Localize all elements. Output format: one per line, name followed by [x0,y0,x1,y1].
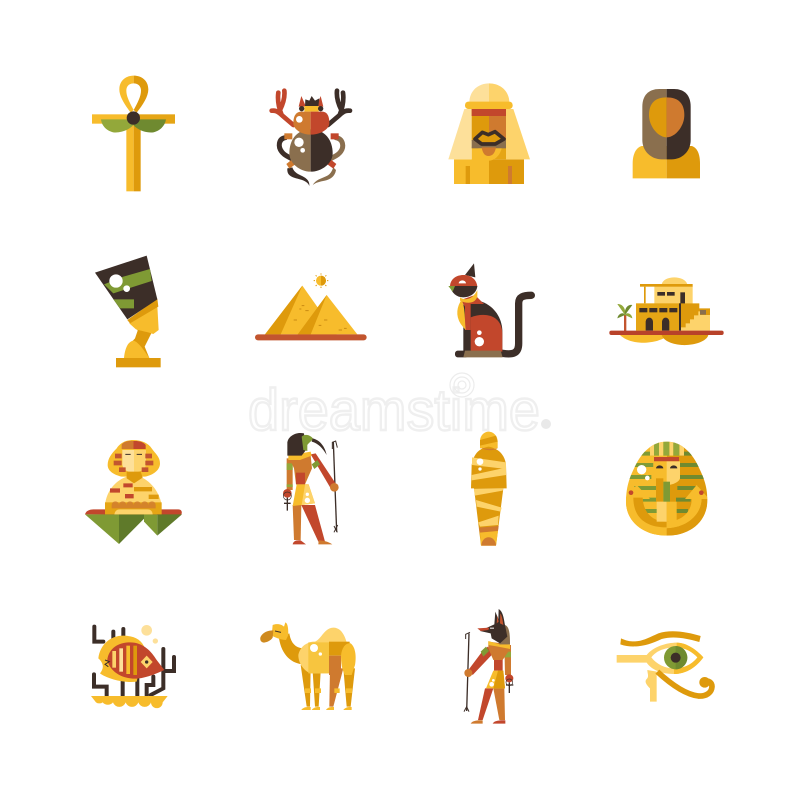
icon: Bastet cat [448,263,531,357]
icon: eye of Horus [617,631,712,702]
icon: Tutankhamun mask [626,442,708,536]
icon: pyramids with sun [255,273,367,340]
icon: mummy [471,432,507,546]
icon: sphinx [85,440,182,544]
icon: sun [314,273,328,288]
icon: palm leaves [617,304,632,318]
icon: woman in hijab [633,89,700,178]
watermark: dreamstime [248,378,540,443]
icon: bedouin man [448,83,530,184]
icon: ankh [92,76,175,191]
icon: desert house with palm [609,277,724,345]
icon: camel [260,622,356,710]
icon: tropical fish and coral [91,625,174,708]
icon: Anubis figure [464,609,513,724]
icon: scarab beetle [272,91,350,186]
icon: Nefertiti bust [95,256,161,367]
icon: Thoth figure [283,433,339,544]
